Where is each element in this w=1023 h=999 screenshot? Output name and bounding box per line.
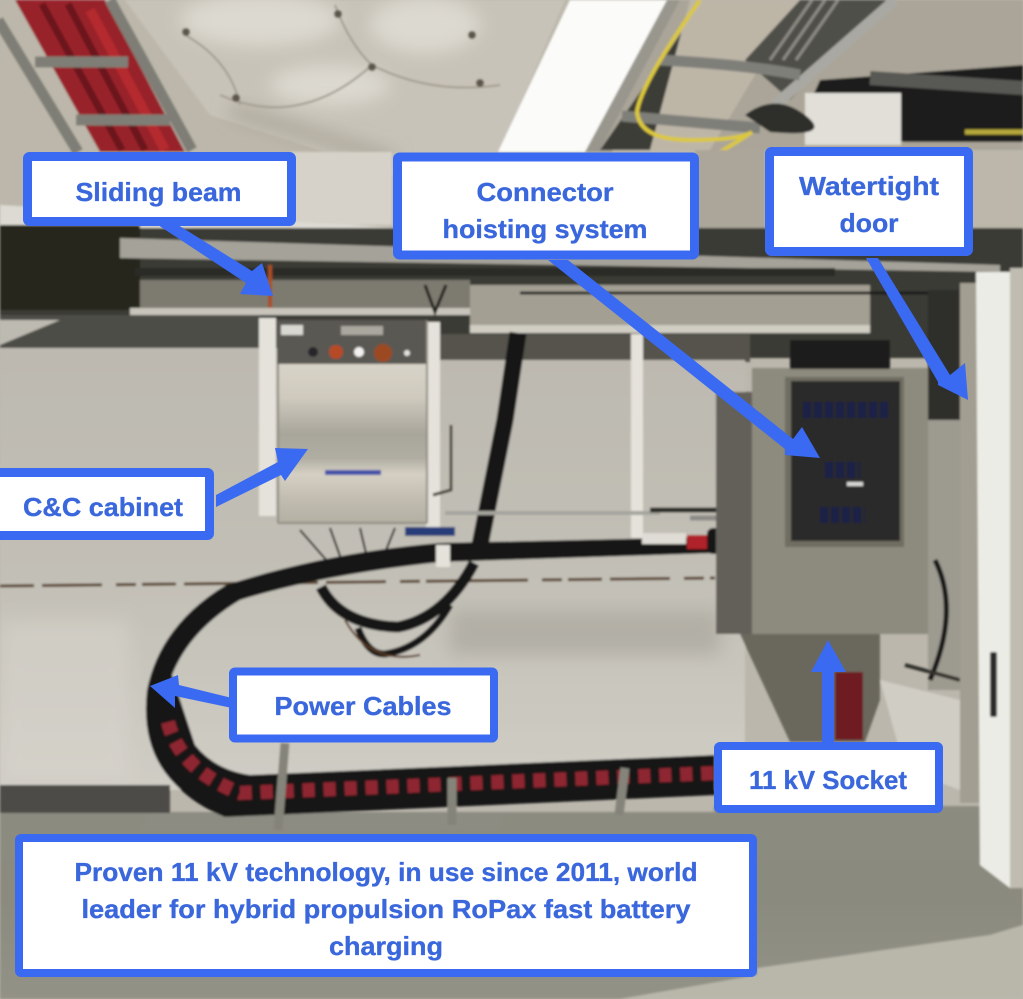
callout: C&C cabinet: [0, 472, 210, 536]
ceiling insulation: [0, 0, 1023, 280]
C&C cabinet: [277, 320, 428, 524]
pipework right of cabinet: [880, 290, 962, 790]
callout: 11 kV socket: [718, 746, 939, 809]
callout: sliding beam: Sliding beam: [76, 177, 241, 207]
watertight door frame: [960, 268, 1023, 888]
control wiring under cabinet: [300, 528, 474, 657]
ceiling light: [498, 0, 667, 152]
arrow: C&C cabinet: [216, 448, 308, 507]
arrow: connector hoisting system: [548, 260, 820, 458]
callout: connector hoisting system: [398, 157, 694, 255]
overhead cable trays, upper right: [600, 0, 1023, 250]
callout: power cables: [233, 672, 494, 738]
white vertical brackets: [259, 318, 643, 538]
11 kV connector plug: [642, 528, 747, 554]
arrow: 11 kV socket: [811, 640, 846, 745]
arrow: power cables: [150, 675, 232, 708]
dark ceiling beam zone: [0, 225, 1023, 362]
arrow: sliding beam: [158, 225, 273, 296]
callout: summary statement: charging: [329, 931, 443, 961]
strut brackets: [278, 743, 625, 830]
thick cable drop from ceiling: [433, 333, 518, 545]
callout: sliding beam: [28, 156, 292, 222]
callout: summary statement: leader for hybrid propulsion RoPax fast battery: [82, 894, 691, 924]
bulkhead wall: [0, 348, 745, 790]
callout: watertight door: [770, 152, 968, 252]
red cable tray, upper left: [0, 0, 192, 152]
floor: [0, 795, 1023, 999]
callout: 11 kV socket: 11 kV Socket: [749, 765, 907, 795]
callout: summary statement: Proven 11 kV technology, in use since 2011, world: [74, 857, 698, 887]
callout: connector hoisting system: hoisting system: [442, 214, 648, 244]
white clamp and blue tag: [405, 527, 455, 567]
cable carrier with red links: [146, 537, 715, 817]
callout: power cables: Power Cables: [274, 691, 452, 721]
socket cabinet: [716, 340, 928, 742]
callout: C&C cabinet: C&C cabinet: [23, 492, 183, 522]
horizontal conduit: [445, 510, 745, 518]
callout: watertight door: Watertight: [799, 171, 939, 201]
callout: summary statement: [19, 838, 753, 973]
arrow: watertight door: [866, 258, 968, 400]
callout: connector hoisting system: Connector: [476, 177, 614, 207]
callout: watertight door: door: [840, 208, 898, 238]
